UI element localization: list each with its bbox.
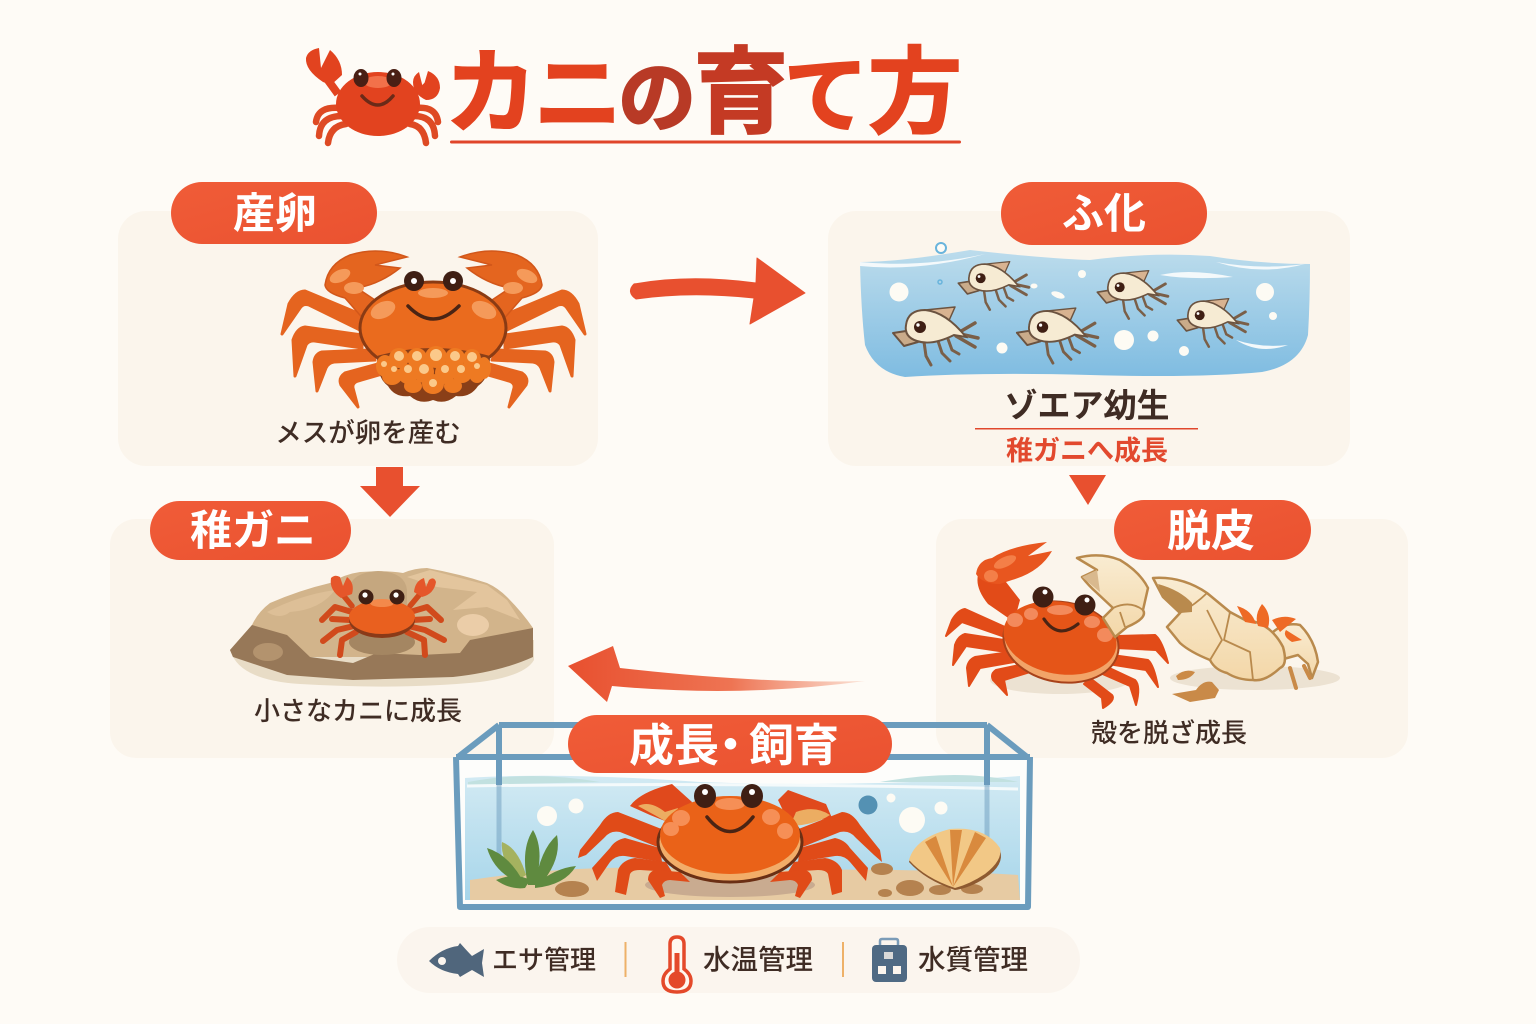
pill heading: 成長	[629, 720, 719, 771]
caption: メスが卵を産む	[275, 418, 461, 448]
zoea larva	[1177, 299, 1248, 347]
panel: ふ化	[828, 182, 1350, 466]
scallop shell	[909, 829, 1001, 890]
pebbles	[555, 863, 983, 897]
crab in tank	[578, 784, 882, 898]
icon: water quality kit	[872, 939, 907, 982]
title text: ニ	[534, 45, 622, 144]
molting crab	[946, 542, 1340, 708]
pill heading	[150, 501, 351, 560]
title	[306, 40, 962, 145]
label: to juvenile: 稚ガニへ成長	[1006, 436, 1168, 466]
panel: 産卵	[118, 182, 598, 466]
panel background	[828, 211, 1350, 466]
title text: 方	[868, 40, 962, 145]
aquarium: 成長・飼育	[456, 715, 1030, 908]
zoea larva	[893, 307, 978, 365]
title crab icon	[306, 48, 440, 143]
panel background	[936, 519, 1408, 758]
title text: 育	[694, 40, 788, 145]
icon: thermometer	[663, 937, 691, 992]
title underline	[450, 140, 961, 144]
panel: 稚ガニ	[110, 501, 554, 758]
panel: 脱皮	[936, 500, 1408, 758]
tank frame	[456, 725, 1030, 907]
arrow: 脱皮 to 成長	[568, 646, 865, 702]
pill heading: 脱皮	[1167, 507, 1255, 556]
tank glass and water	[458, 757, 1027, 908]
rock with juvenile crab	[230, 568, 534, 687]
shell fins and debris	[1172, 604, 1302, 702]
title text: て	[784, 49, 868, 143]
care legend bar	[397, 927, 1080, 993]
sand	[470, 868, 1020, 900]
panel background	[118, 211, 598, 466]
zoea larva	[1017, 308, 1098, 363]
pill heading	[568, 715, 892, 773]
caption: 小さなカニに成長	[254, 696, 462, 726]
label: temperature: 水温管理	[703, 944, 813, 975]
pill heading	[171, 182, 377, 244]
icon: crab with eggs	[282, 251, 585, 407]
arrow: 産卵 to ふ化	[630, 258, 805, 324]
zoea larva	[958, 262, 1029, 310]
seaweed	[487, 830, 576, 888]
pill heading: 飼育	[749, 720, 839, 771]
pill heading	[1114, 500, 1311, 560]
pill heading: 稚ガニ	[190, 507, 316, 554]
molted shell	[1077, 555, 1318, 688]
title text: の	[618, 54, 696, 142]
caption: 殻を脱ざ成長	[1091, 718, 1247, 748]
water with zoea larvae	[860, 243, 1310, 377]
title text: カ	[445, 43, 537, 145]
bubbles	[537, 794, 948, 833]
label: zoea: ゾエア幼生	[1004, 387, 1170, 424]
panel background	[110, 519, 554, 758]
arrow: 産卵 to 稚ガニ	[360, 467, 420, 517]
label: feed: エサ管理	[492, 945, 596, 975]
zoea larva	[1097, 271, 1168, 319]
label: water quality: 水質管理	[918, 944, 1028, 975]
pill heading: ふ化	[1062, 190, 1146, 237]
icon: fish	[429, 943, 484, 977]
arrow: ふ化 to 脱皮	[1069, 475, 1106, 505]
pill heading: 産卵	[233, 190, 317, 237]
pill heading: ・	[708, 720, 753, 771]
pill heading	[1001, 182, 1207, 245]
